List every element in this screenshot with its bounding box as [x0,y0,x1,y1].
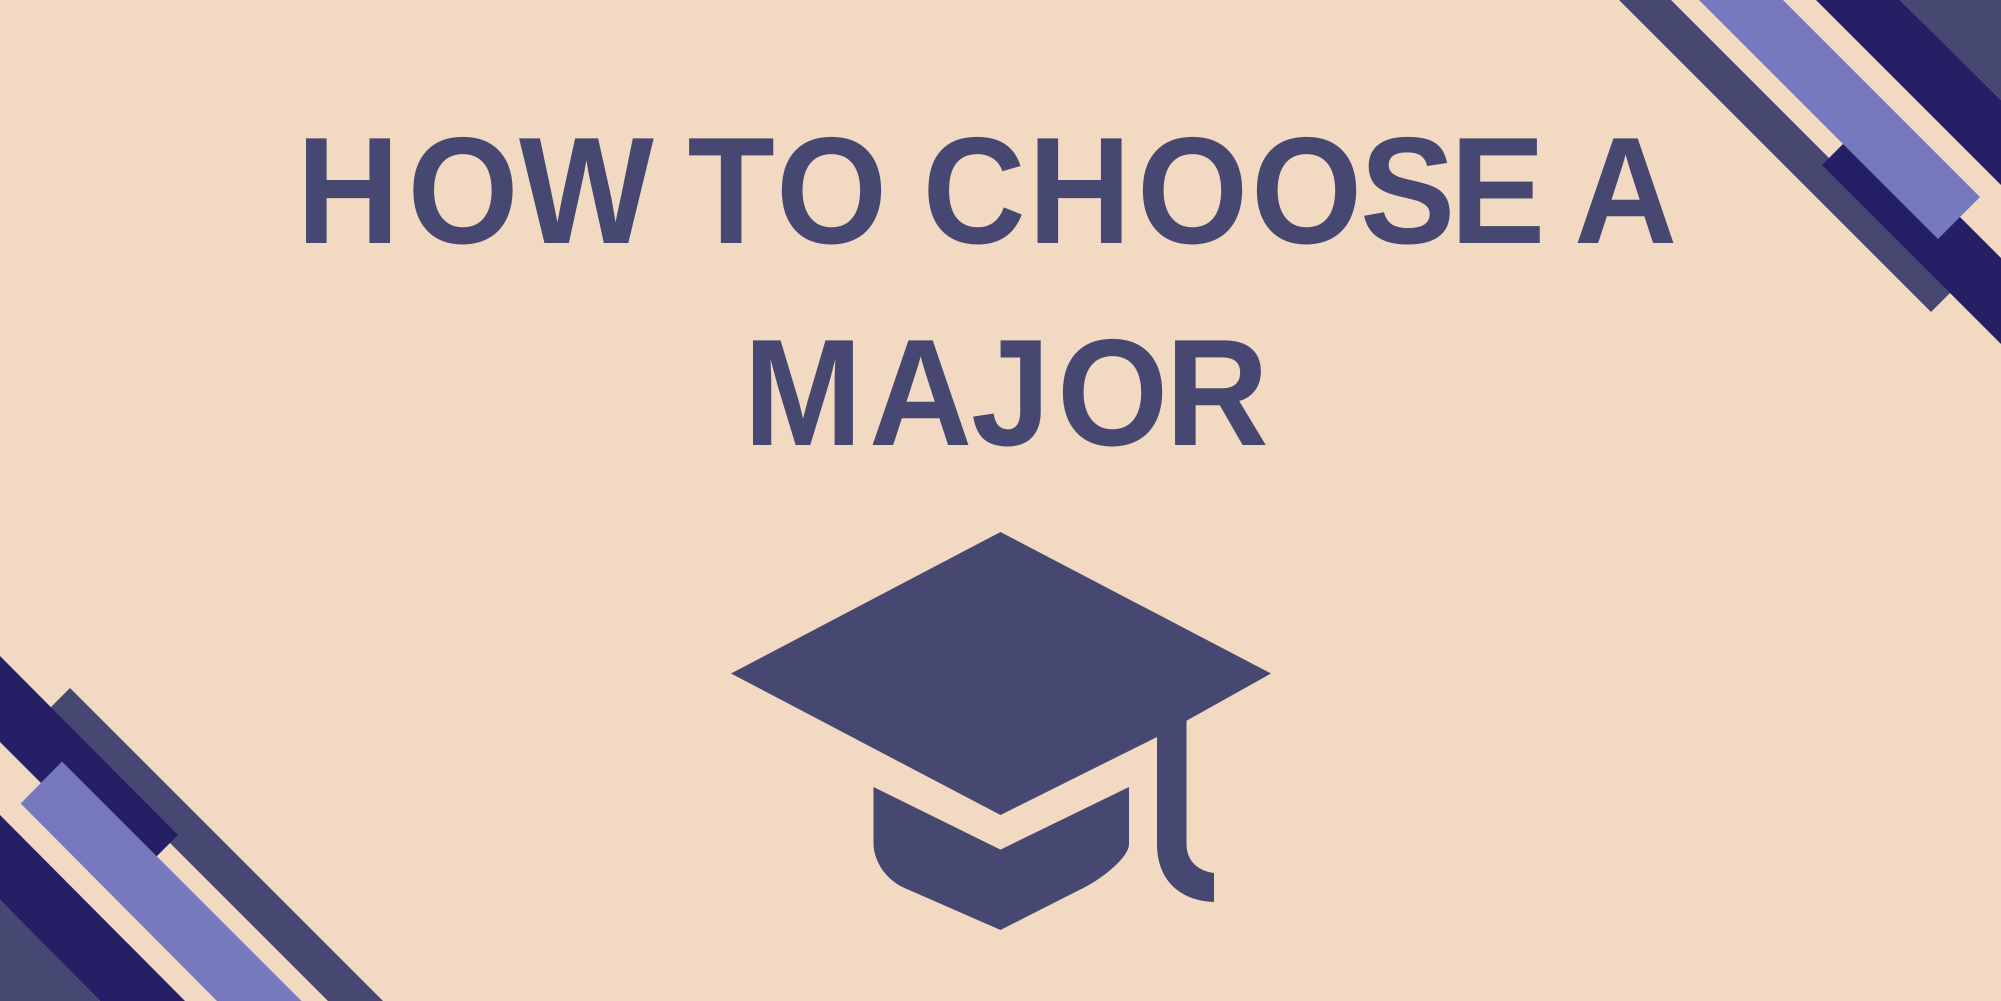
top-right corner stripes [1619,0,2001,344]
bottom-left corner stripes [0,656,383,1001]
icon: graduation cap [731,532,1271,930]
title: MAJOR [743,308,1269,478]
title [0,106,1677,478]
title: HOW TO CHOOSE A [0,106,1677,276]
